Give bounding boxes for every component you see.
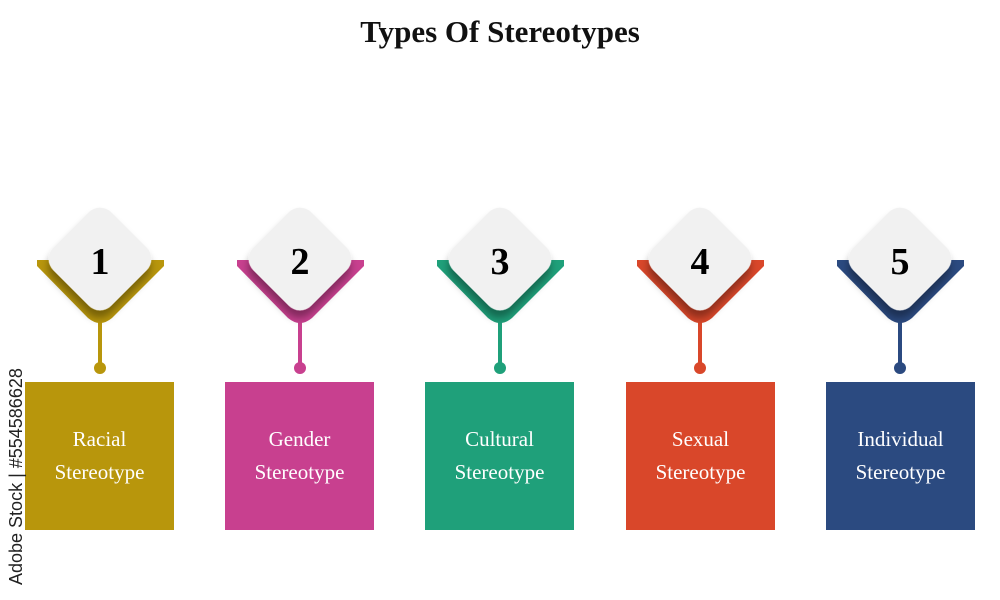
box 4: Stereotype	[656, 460, 745, 484]
diamond 4: 4	[690, 241, 710, 283]
diamond 4	[642, 201, 758, 317]
box 2	[225, 382, 374, 530]
diamond 5: 5	[890, 241, 910, 283]
diamond 2: 2	[290, 241, 310, 283]
diamond 1	[42, 201, 158, 317]
item 2 connector	[237, 260, 364, 374]
diamond 3: 3	[490, 241, 510, 283]
item 4 connector	[637, 260, 764, 374]
box 3	[425, 382, 574, 530]
watermark: Adobe Stock | #554586628	[6, 368, 26, 585]
diamond 5	[842, 201, 958, 317]
item 1 connector	[37, 260, 164, 374]
item 3 connector	[437, 260, 564, 374]
box 1: Racial	[73, 427, 126, 451]
box 5	[826, 382, 975, 530]
box 5: Stereotype	[856, 460, 945, 484]
box 2: Gender	[269, 427, 330, 451]
box 1: Stereotype	[55, 460, 144, 484]
box 3: Cultural	[465, 427, 534, 451]
box 2: Stereotype	[255, 460, 344, 484]
diamond 3	[442, 201, 558, 317]
title: Types Of Stereotypes	[360, 14, 640, 49]
box 4: Sexual	[672, 427, 729, 451]
diamond 1: 1	[90, 241, 110, 283]
item 5 connector	[837, 260, 964, 374]
diamond 2	[242, 201, 358, 317]
box 1	[25, 382, 174, 530]
box 4	[626, 382, 775, 530]
box 5: Individual	[857, 427, 944, 451]
box 3: Stereotype	[455, 460, 544, 484]
